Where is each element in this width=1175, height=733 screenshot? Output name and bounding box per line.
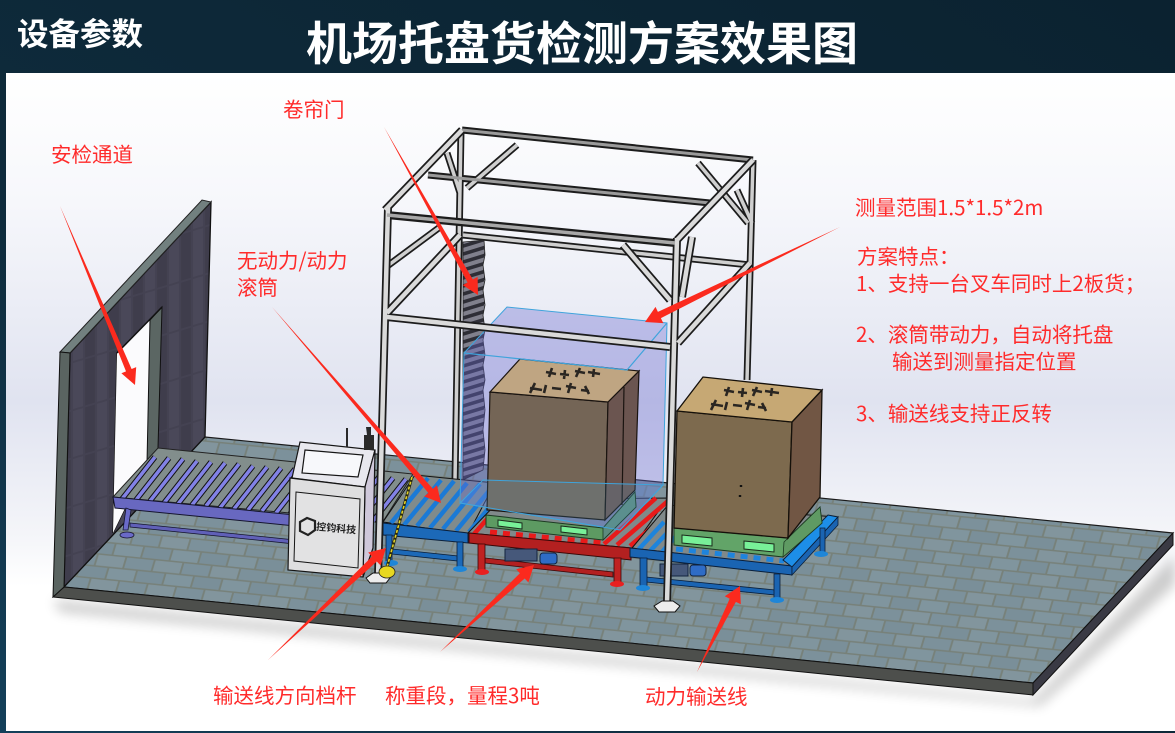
security passage wall xyxy=(53,200,211,597)
label: security passage: 安检通道 xyxy=(51,138,133,168)
cabinet logo xyxy=(300,518,357,536)
roller shutter door xyxy=(463,240,485,480)
carton xyxy=(674,377,822,538)
label: rollers xyxy=(237,244,348,301)
text block: solution features: 方案特点： xyxy=(857,240,960,270)
brick floor xyxy=(53,437,1173,695)
title: 机场托盘货检测方案效果图 xyxy=(306,18,858,70)
carton dots xyxy=(740,485,741,497)
blue powered conveyor xyxy=(630,505,838,603)
arrow: measurement range xyxy=(645,227,840,323)
carton xyxy=(487,359,639,520)
cabinet logo: 控钧科技 xyxy=(316,520,357,536)
pallet xyxy=(486,492,636,540)
frame: front columns and beams xyxy=(378,130,753,603)
label: direction barrier: 输送线方向档杆 xyxy=(213,679,356,709)
text block: solution features: 1、支持一台叉车同时上2板货； xyxy=(856,267,1145,297)
text block: solution features xyxy=(856,240,1145,427)
arrow: weighing section xyxy=(440,565,534,652)
arrow: direction barrier xyxy=(268,548,386,660)
label: powered conveyor: 动力输送线 xyxy=(645,680,748,710)
red weighing conveyor section xyxy=(468,498,672,587)
cargo pallet in measurement position xyxy=(486,359,639,540)
carton top marking xyxy=(530,368,600,394)
floor shadow xyxy=(53,555,1175,706)
arrow: security passage xyxy=(60,206,136,385)
arrow: powered conveyor xyxy=(697,586,741,672)
text block: solution features: 2、滚筒带动力，自动将托盘 xyxy=(856,318,1113,348)
3D scene xyxy=(53,130,1175,706)
arrow: rollers xyxy=(272,307,441,503)
label: measurement range: 测量范围1.5*1.5*2m xyxy=(855,191,1043,221)
label: rollers: 无动力/动力 xyxy=(237,244,348,274)
control cabinet xyxy=(288,427,375,577)
second cargo pallet on powered conveyor xyxy=(674,377,822,557)
purple unpowered conveyor xyxy=(113,448,413,544)
text block: solution features: 输送到测量指定位置 xyxy=(892,345,1076,375)
label: roller shutter door: 卷帘门 xyxy=(283,93,344,123)
arrow: roller door xyxy=(384,127,478,295)
direction barrier rod xyxy=(379,477,412,578)
text block: solution features: 3、输送线支持正反转 xyxy=(856,397,1052,427)
carton top marking xyxy=(711,387,779,411)
heading: equipment parameters: 设备参数 xyxy=(17,16,143,52)
motor under powered section xyxy=(660,564,706,576)
volume top front edge xyxy=(464,323,667,370)
column foot plates xyxy=(366,573,680,612)
label: rollers: 滚筒 xyxy=(237,271,278,301)
pallet xyxy=(674,507,822,557)
frame: rear columns and beams xyxy=(386,130,753,480)
label: weighing section: 称重段，量程3吨 xyxy=(385,679,540,709)
blue conveyor section xyxy=(383,475,506,572)
motor under weighing section xyxy=(505,549,557,564)
stack light xyxy=(346,427,374,450)
volume floor outline xyxy=(460,480,663,530)
transparent measurement volume xyxy=(460,307,667,530)
